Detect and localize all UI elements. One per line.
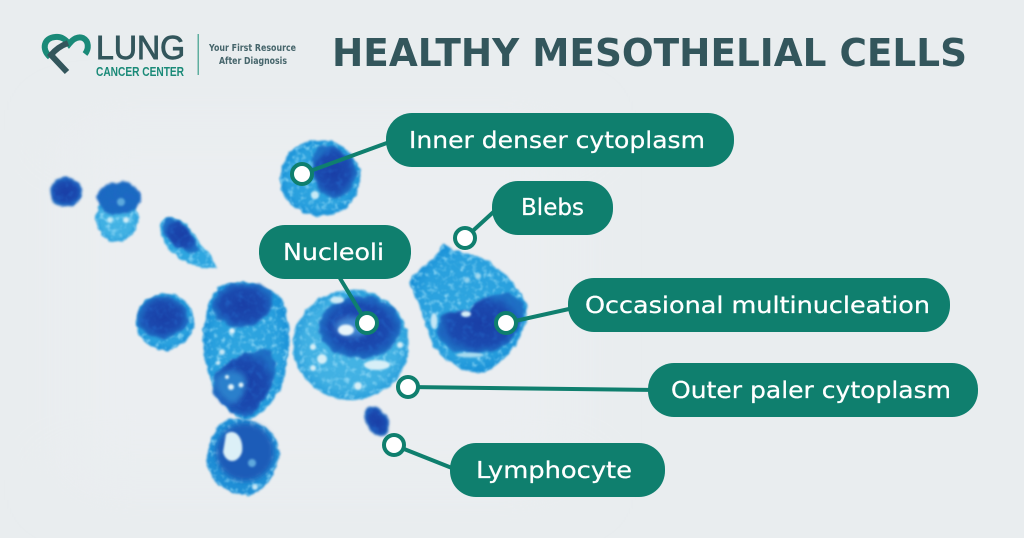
title: HEALTHY MESOTHELIAL CELLS [332, 31, 967, 75]
callout: blebs: Blebs [521, 195, 584, 221]
callout: lymphocyte [384, 435, 665, 497]
micrograph of cells [50, 140, 527, 495]
cell: central large [293, 290, 409, 400]
cell cluster: tall double cell [203, 282, 289, 420]
callout: outer paler cytoplasm: Outer paler cytoplasm [671, 378, 951, 404]
cell: round dark nucleus [136, 294, 194, 350]
cell: upper left with pale base [96, 182, 141, 242]
cell: teardrop [161, 217, 216, 268]
logo tagline: Your First Resource [208, 43, 296, 54]
callout: blebs [455, 181, 613, 248]
logo tagline [208, 43, 296, 67]
cell: small dark far left [50, 178, 82, 206]
callout: nucleoli: Nucleoli [283, 240, 384, 266]
cell: lower ringed [207, 419, 278, 495]
logo tagline: After Diagnosis [219, 56, 287, 67]
callout: nucleoli [259, 225, 411, 333]
callout: lymphocyte: Lymphocyte [476, 458, 632, 484]
logo [45, 29, 296, 79]
logo wordmark: LUNG [96, 29, 185, 66]
callout: inner denser cytoplasm: Inner denser cytoplasm [409, 128, 705, 154]
logo subtitle: CANCER CENTER [96, 64, 184, 79]
callout: inner denser cytoplasm [292, 113, 734, 184]
callout: outer paler cytoplasm [398, 363, 978, 417]
callout: occasional multinucleation [496, 278, 950, 333]
cell: top round [280, 140, 360, 216]
cell: right with bleb [409, 243, 527, 373]
callout: occasional multinucleation: Occasional multinucleation [585, 293, 930, 319]
icon: heart logo mark [45, 37, 88, 72]
cell: lymphocyte [360, 402, 394, 440]
